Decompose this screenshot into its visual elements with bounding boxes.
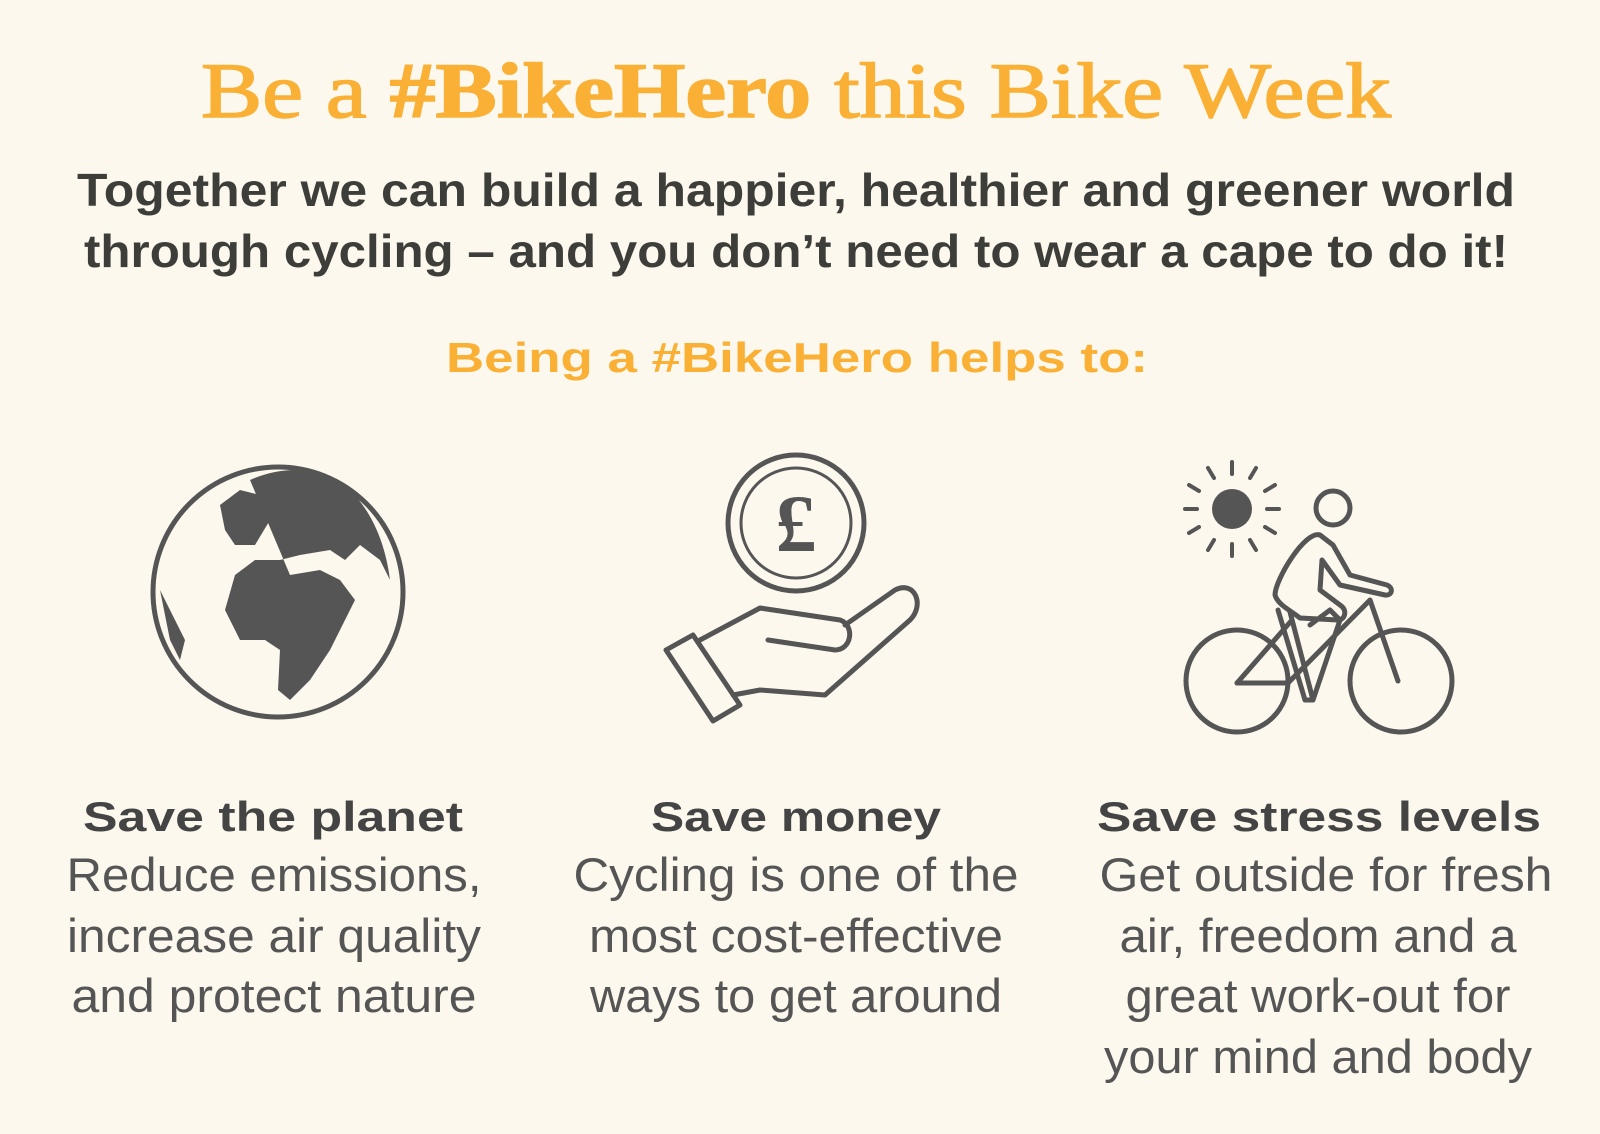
column: save the planet: and protect nature bbox=[72, 969, 476, 1022]
column: save stress levels: Get outside for fresh bbox=[1100, 848, 1552, 901]
subtitle bbox=[77, 164, 1515, 277]
column: save money bbox=[574, 793, 1018, 1022]
column: save the planet: increase air quality bbox=[67, 909, 482, 962]
column: save stress levels: great work-out for bbox=[1126, 969, 1510, 1022]
column: save stress levels: Save stress levels bbox=[1097, 793, 1541, 840]
subheading: Being a #BikeHero helps to: bbox=[446, 334, 1148, 381]
subtitle: through cycling – and you don’t need to wear a cape to do it! bbox=[84, 225, 1508, 277]
column: save stress levels: air, freedom and a bbox=[1120, 909, 1517, 962]
column: save money: Cycling is one of the bbox=[574, 848, 1018, 901]
column: save stress levels bbox=[1097, 793, 1552, 1083]
column: save the planet bbox=[66, 793, 482, 1022]
column: save money: Save money bbox=[651, 793, 942, 840]
icon: coin in hand bbox=[666, 455, 917, 721]
column: save stress levels: your mind and body bbox=[1104, 1030, 1533, 1083]
column: save money: ways to get around bbox=[589, 969, 1002, 1022]
icon: cyclist with sun bbox=[1185, 462, 1452, 732]
column: save the planet: Reduce emissions, bbox=[66, 848, 482, 901]
column: save money: most cost-effective bbox=[589, 909, 1003, 962]
icon: coin in hand: £ bbox=[776, 478, 816, 569]
column: save the planet: Save the planet bbox=[83, 793, 463, 840]
title: Be a #BikeHero this Bike Week bbox=[201, 47, 1391, 134]
subtitle: Together we can build a happier, healthier and greener world bbox=[77, 164, 1515, 216]
icon: globe bbox=[153, 467, 403, 717]
